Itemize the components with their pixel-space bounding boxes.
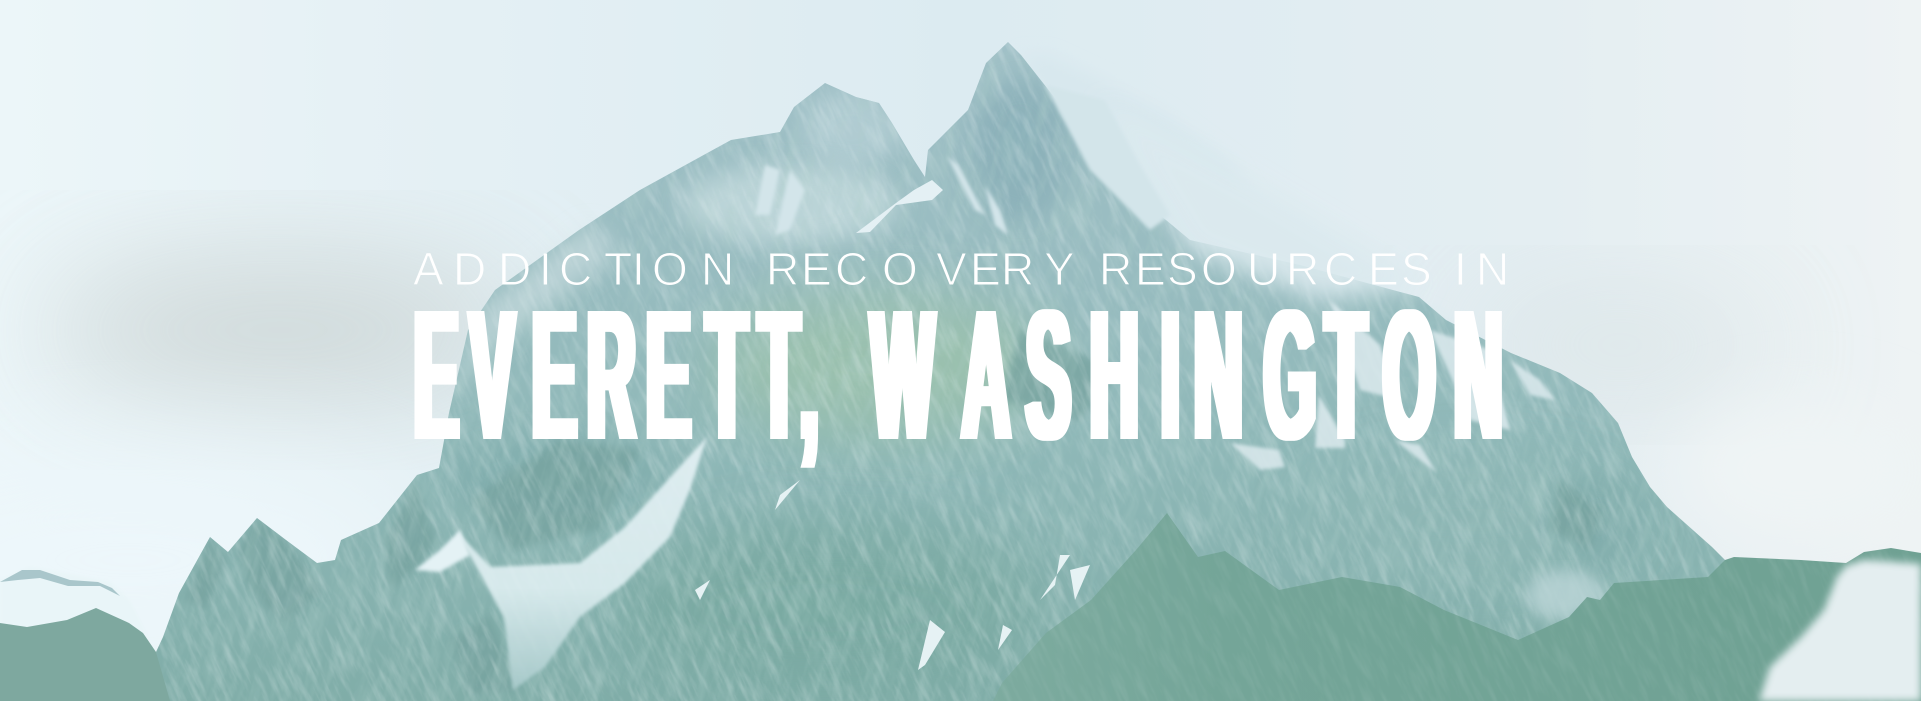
foreground dark ridge: [993, 513, 1921, 701]
fog and snow ridge behind summit: [1021, 55, 1507, 360]
summit saddle snow: [856, 180, 943, 233]
dark rock facets: [185, 330, 1600, 695]
small snowfield: [415, 530, 470, 572]
valley fog: [1525, 570, 1605, 620]
lower white flecks: [695, 480, 1090, 670]
low cloud right: [1759, 560, 1921, 701]
main heading: EVERETT, WASHINGTON: [414, 270, 1502, 479]
lower right snow patches: [1230, 300, 1555, 473]
summit snow streaks: [755, 85, 1170, 235]
subtitle: ADDICTION RECOVERY RESOURCES IN: [413, 243, 1509, 295]
left glacier: [429, 437, 707, 690]
fog on left shoulder: [450, 225, 620, 400]
foreground rock left: [0, 608, 170, 701]
rock tonal patches and texture: [159, 42, 1724, 701]
distant snowy peak left: [0, 567, 150, 640]
title block: [413, 243, 1509, 479]
fog on ridge: [1100, 100, 1430, 300]
mountain rock body: [156, 42, 1725, 701]
main mountain: [156, 42, 1725, 701]
